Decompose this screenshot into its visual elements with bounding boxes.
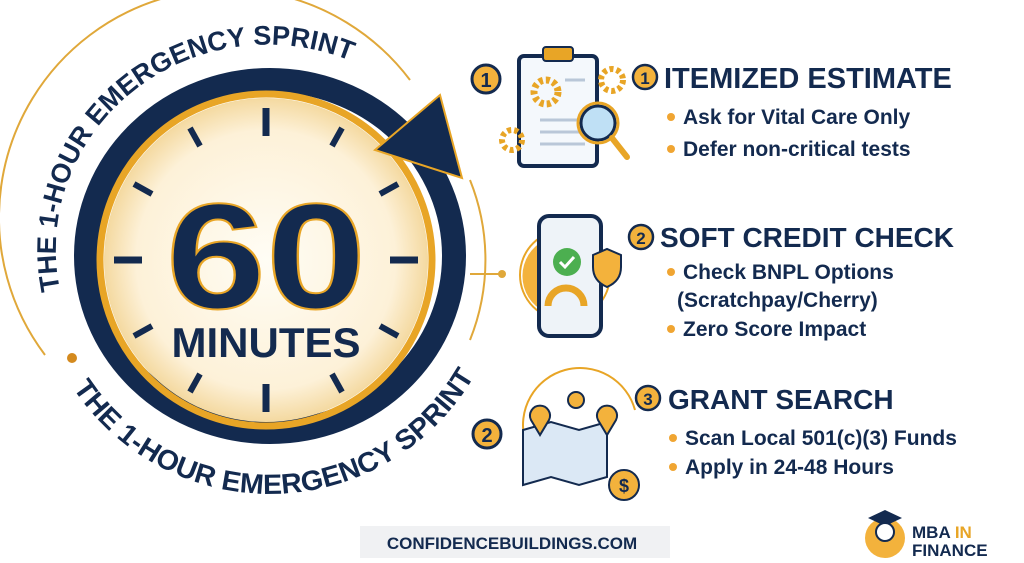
- navy ring: [86, 80, 454, 432]
- icon: phone: [520, 216, 621, 336]
- section 2: SOFT CREDIT CHECK: [660, 222, 954, 253]
- section 2: 2: [636, 229, 646, 248]
- badge 1: 1: [480, 70, 492, 92]
- badge 1: [472, 65, 500, 93]
- ticks: [114, 108, 418, 412]
- badge 2 left: [473, 420, 501, 448]
- icon: map: [523, 368, 639, 500]
- section 2: Check BNPL Options: [683, 261, 894, 284]
- arrow head: [375, 95, 462, 178]
- gold ring: [100, 94, 432, 426]
- icon: clipboard: [502, 47, 627, 166]
- section 1: Ask for Vital Care Only: [683, 106, 911, 129]
- logo: [865, 510, 988, 560]
- section 3: Apply in 24-48 Hours: [685, 456, 894, 479]
- logo: MBA IN: [912, 523, 972, 542]
- face: [104, 98, 428, 422]
- icon: map: $: [619, 476, 629, 496]
- section 3: [636, 384, 957, 479]
- arc text top: THE 1-HOUR EMERGENCY SPRINT: [37, 26, 357, 293]
- section 1: 1: [640, 69, 650, 88]
- arc text bottom: THE 1-HOUR EMERGENCY SPRINT: [76, 366, 471, 494]
- section 2: [629, 222, 954, 341]
- section 3: 3: [643, 390, 653, 409]
- section 1: [633, 63, 952, 161]
- minutes: MINUTES: [172, 319, 360, 366]
- badge 2 left: 2: [481, 425, 493, 447]
- footer url: CONFIDENCEBUILDINGS.COM: [387, 534, 637, 553]
- section 1: Defer non-critical tests: [683, 138, 911, 161]
- section 2: Zero Score Impact: [683, 318, 866, 341]
- clock: [0, 0, 486, 494]
- section 1: ITEMIZED ESTIMATE: [664, 63, 952, 95]
- 60: 60: [166, 173, 366, 341]
- section 3: GRANT SEARCH: [668, 384, 894, 415]
- section 2: (Scratchpay/Cherry): [677, 289, 878, 312]
- section 3: Scan Local 501(c)(3) Funds: [685, 427, 957, 450]
- footer url: [360, 526, 670, 558]
- connector: [470, 270, 506, 278]
